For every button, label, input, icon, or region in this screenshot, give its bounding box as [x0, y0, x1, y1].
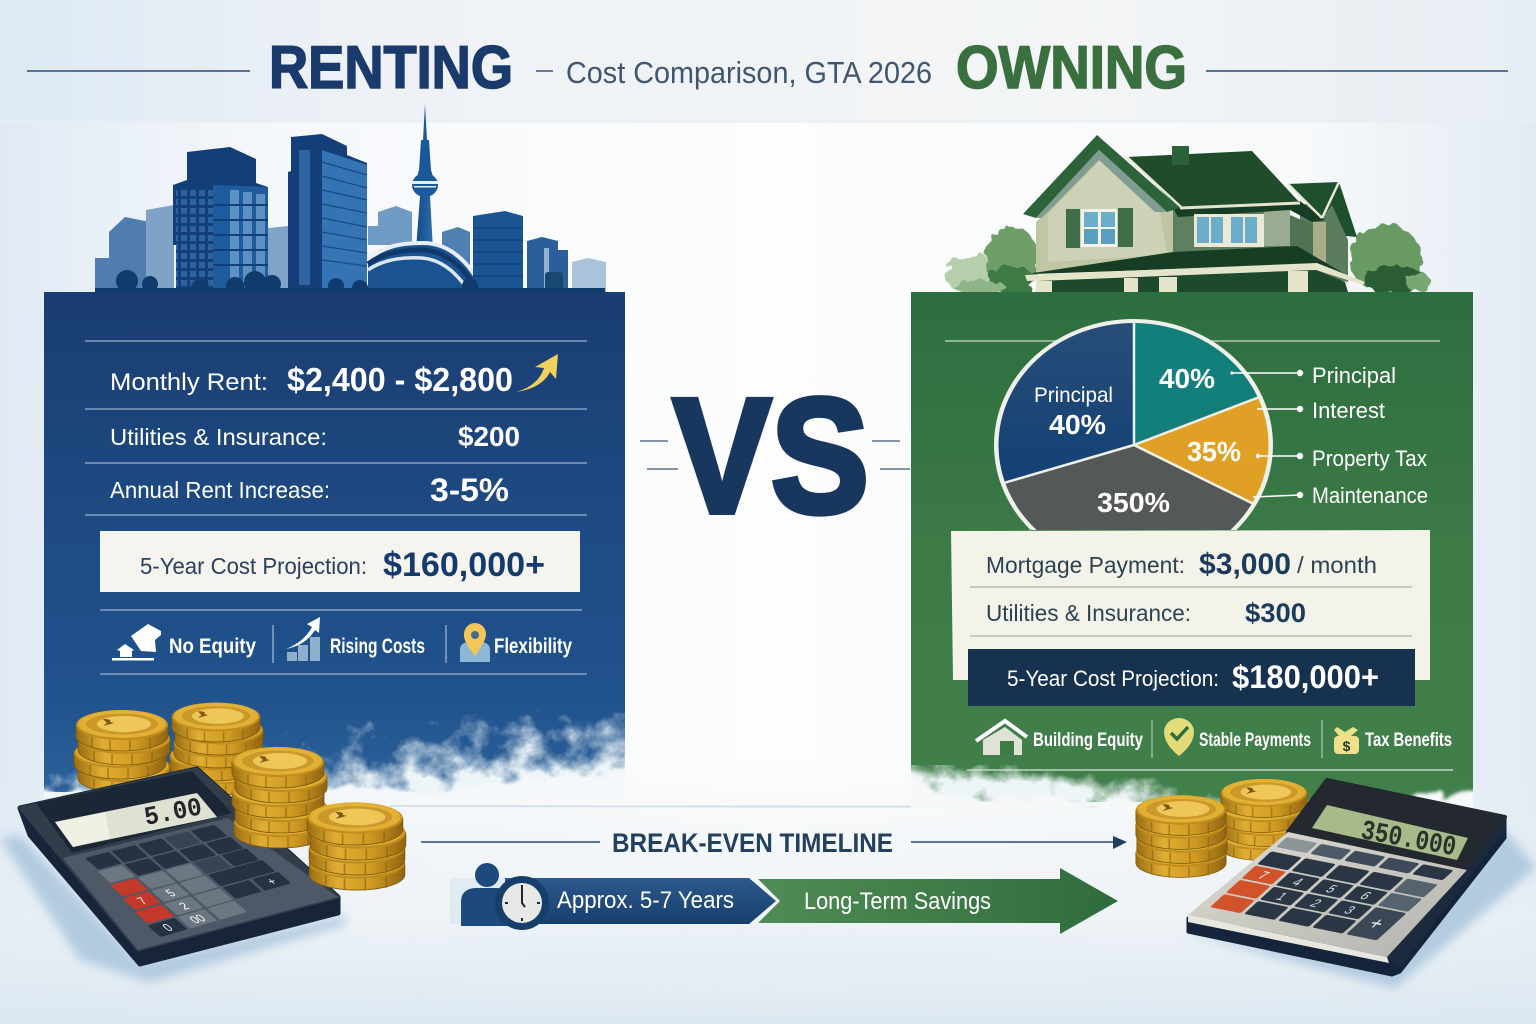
icon: clock	[495, 876, 549, 930]
pie chart	[994, 319, 1273, 530]
porch roof	[1033, 246, 1350, 277]
icon: rising costs	[286, 617, 320, 661]
pie legend: Principal	[1312, 363, 1396, 388]
left keypad	[85, 825, 291, 937]
timeline arrow	[450, 863, 1118, 934]
label: rising costs: Rising Costs	[330, 635, 425, 658]
window left	[1066, 209, 1080, 248]
card: 5-year projection	[100, 531, 580, 592]
main roof	[1127, 151, 1300, 209]
card: 5-year projection: 5-Year Cost Projection:	[140, 553, 367, 579]
skyline illustration	[95, 104, 606, 297]
window right	[1194, 214, 1264, 247]
label: flexibility: Flexibility	[494, 635, 572, 658]
side wing	[1300, 200, 1348, 282]
pie legend: Interest	[1312, 398, 1385, 423]
title: renting: RENTING	[269, 34, 513, 101]
icon: flexibility pin	[460, 623, 490, 662]
label: building equity: Building Equity	[1033, 730, 1143, 751]
coins: front left stacks	[232, 747, 406, 890]
left display: 5.00	[142, 792, 204, 833]
header band	[0, 0, 1536, 123]
break-even timeline heading	[421, 828, 1127, 858]
pie chart: 350%	[1097, 487, 1170, 518]
VS heading: VS	[673, 364, 869, 547]
icon: building equity	[976, 721, 1027, 755]
coins: right stacks	[1136, 779, 1309, 877]
bar: 5-year projection: 5-Year Cost Projection:	[1007, 666, 1219, 691]
right keypad: 3	[1340, 904, 1359, 916]
house illustration	[945, 135, 1430, 295]
segment: approx years: Approx. 5-7 Years	[557, 887, 734, 914]
segment: long-term savings: Long-Term Savings	[804, 888, 991, 915]
icon: person	[461, 863, 509, 926]
row: monthly rent: Monthly Rent:	[110, 369, 268, 396]
porch	[1036, 270, 1348, 292]
row: monthly rent	[110, 354, 558, 398]
segment: long-term savings	[758, 868, 1118, 934]
icon: no equity	[112, 624, 161, 660]
card: mortgage details: Mortgage Payment:	[986, 552, 1185, 578]
row: monthly rent: $2,400 - $2,800	[287, 361, 513, 398]
left keypad: +	[263, 876, 281, 888]
row: annual increase: Annual Rent Increase:	[110, 477, 330, 503]
gable	[1036, 160, 1173, 272]
right keypad: 7	[1254, 869, 1273, 882]
pie legend: Maintenance	[1312, 483, 1428, 508]
dome	[368, 244, 482, 292]
right keypad: 6	[1356, 890, 1375, 902]
card: 5-year projection: $160,000+	[383, 546, 545, 584]
segment: approx years	[505, 878, 776, 924]
label: stable payments: Stable Payments	[1199, 730, 1311, 751]
panel: owning	[890, 292, 1490, 825]
row: utilities: $200	[458, 421, 520, 452]
left keypad: 7	[133, 895, 151, 907]
icon: tax benefits	[1334, 727, 1359, 754]
left keypad: 00	[186, 912, 209, 926]
title: subtitle: Cost Comparison, GTA 2026	[566, 55, 932, 90]
card: mortgage details: $3,000	[1199, 548, 1291, 581]
pie chart: 35%	[1187, 436, 1241, 467]
right keypad: 1	[1272, 890, 1291, 903]
title: owning: OWNING	[956, 34, 1187, 101]
row: annual increase: 3-5%	[430, 472, 509, 508]
pie chart: 40%	[1159, 363, 1215, 394]
card: mortgage details: / month	[1297, 552, 1377, 578]
icon: stable payments	[1164, 718, 1194, 756]
right keypad: +	[1361, 914, 1392, 934]
tower B	[288, 134, 367, 292]
right keypad: 2	[1306, 897, 1325, 909]
right keypad: 4	[1288, 876, 1307, 888]
tower C	[473, 211, 523, 292]
row: utilities: Utilities & Insurance:	[110, 424, 327, 450]
left keypad: 0	[159, 922, 177, 934]
tree silhouettes	[95, 270, 605, 297]
left keypad: 2	[175, 900, 193, 912]
pie legend: Property Tax	[1312, 446, 1427, 471]
left keypad: 5	[162, 887, 180, 899]
upper wall	[1165, 205, 1290, 262]
card: mortgage details: $300	[1245, 598, 1306, 628]
pie chart: Principal	[1034, 384, 1113, 407]
bar: 5-year projection: $180,000+	[1232, 659, 1379, 695]
label: no equity: No Equity	[169, 635, 256, 658]
row: annual increase	[110, 472, 509, 508]
card: mortgage details: Utilities & Insurance:	[986, 600, 1191, 626]
label: tax benefits: Tax Benefits	[1365, 730, 1452, 751]
icon: tax benefits: $	[1343, 738, 1351, 754]
right keypad	[1210, 837, 1454, 940]
CN tower	[416, 104, 434, 180]
calculator: left	[0, 769, 345, 982]
tower A	[173, 147, 268, 292]
right keypad: 5	[1322, 883, 1341, 895]
panel: renting	[44, 292, 625, 798]
card: mortgage details	[951, 530, 1430, 680]
pie legend	[1230, 363, 1428, 508]
right display: 350.000	[1358, 816, 1458, 864]
calculator: right	[1178, 780, 1536, 988]
pie chart: 40%	[1049, 409, 1106, 440]
row: utilities	[110, 421, 520, 452]
bar: 5-year projection	[968, 649, 1415, 706]
trees	[945, 224, 1430, 295]
coins: left stacks	[74, 703, 263, 795]
break-even timeline heading: BREAK-EVEN TIMELINE	[612, 828, 893, 858]
icon: rising arrow	[516, 354, 558, 392]
